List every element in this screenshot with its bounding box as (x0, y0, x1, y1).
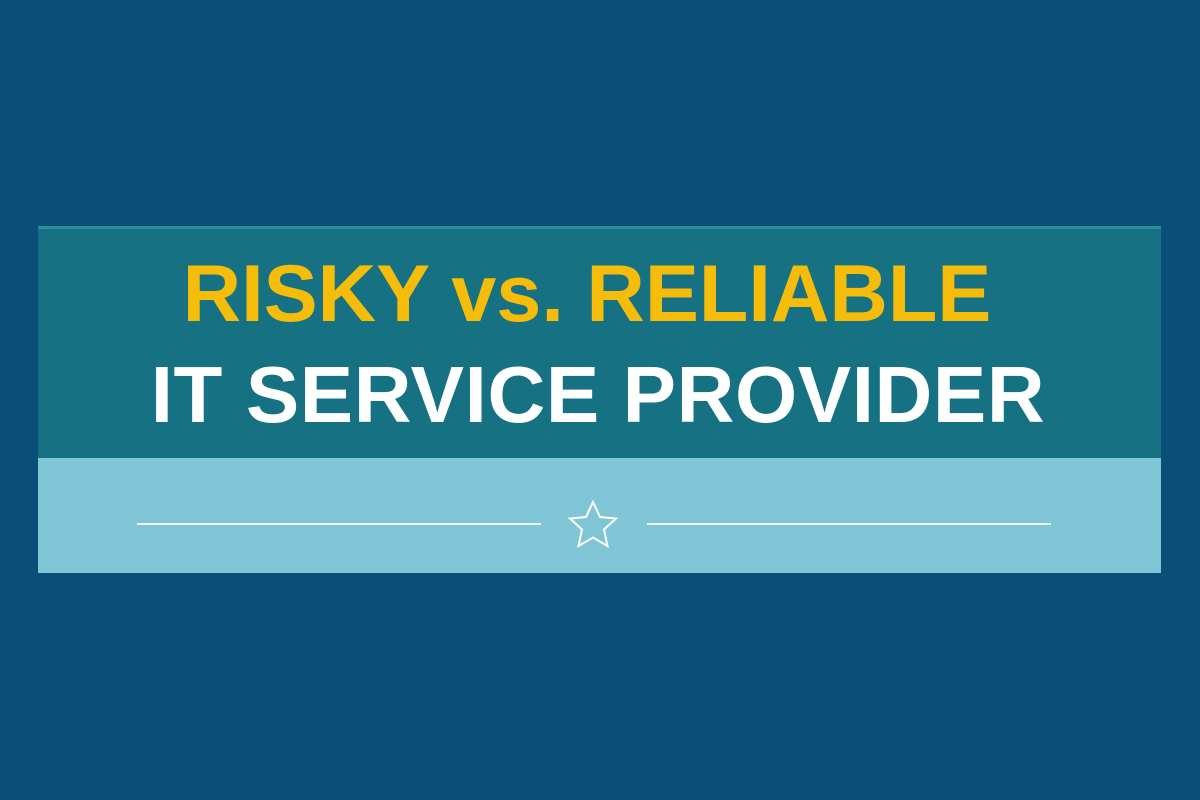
icon: star (570, 502, 616, 546)
title line 1: RISKY vs. RELIABLE (183, 249, 991, 339)
divider with star icon (137, 500, 1051, 548)
panel: light band (38, 458, 1161, 573)
title line 2: IT SERVICE PROVIDER (151, 350, 1045, 439)
panel: title band (38, 226, 1161, 458)
banner (38, 226, 1161, 573)
